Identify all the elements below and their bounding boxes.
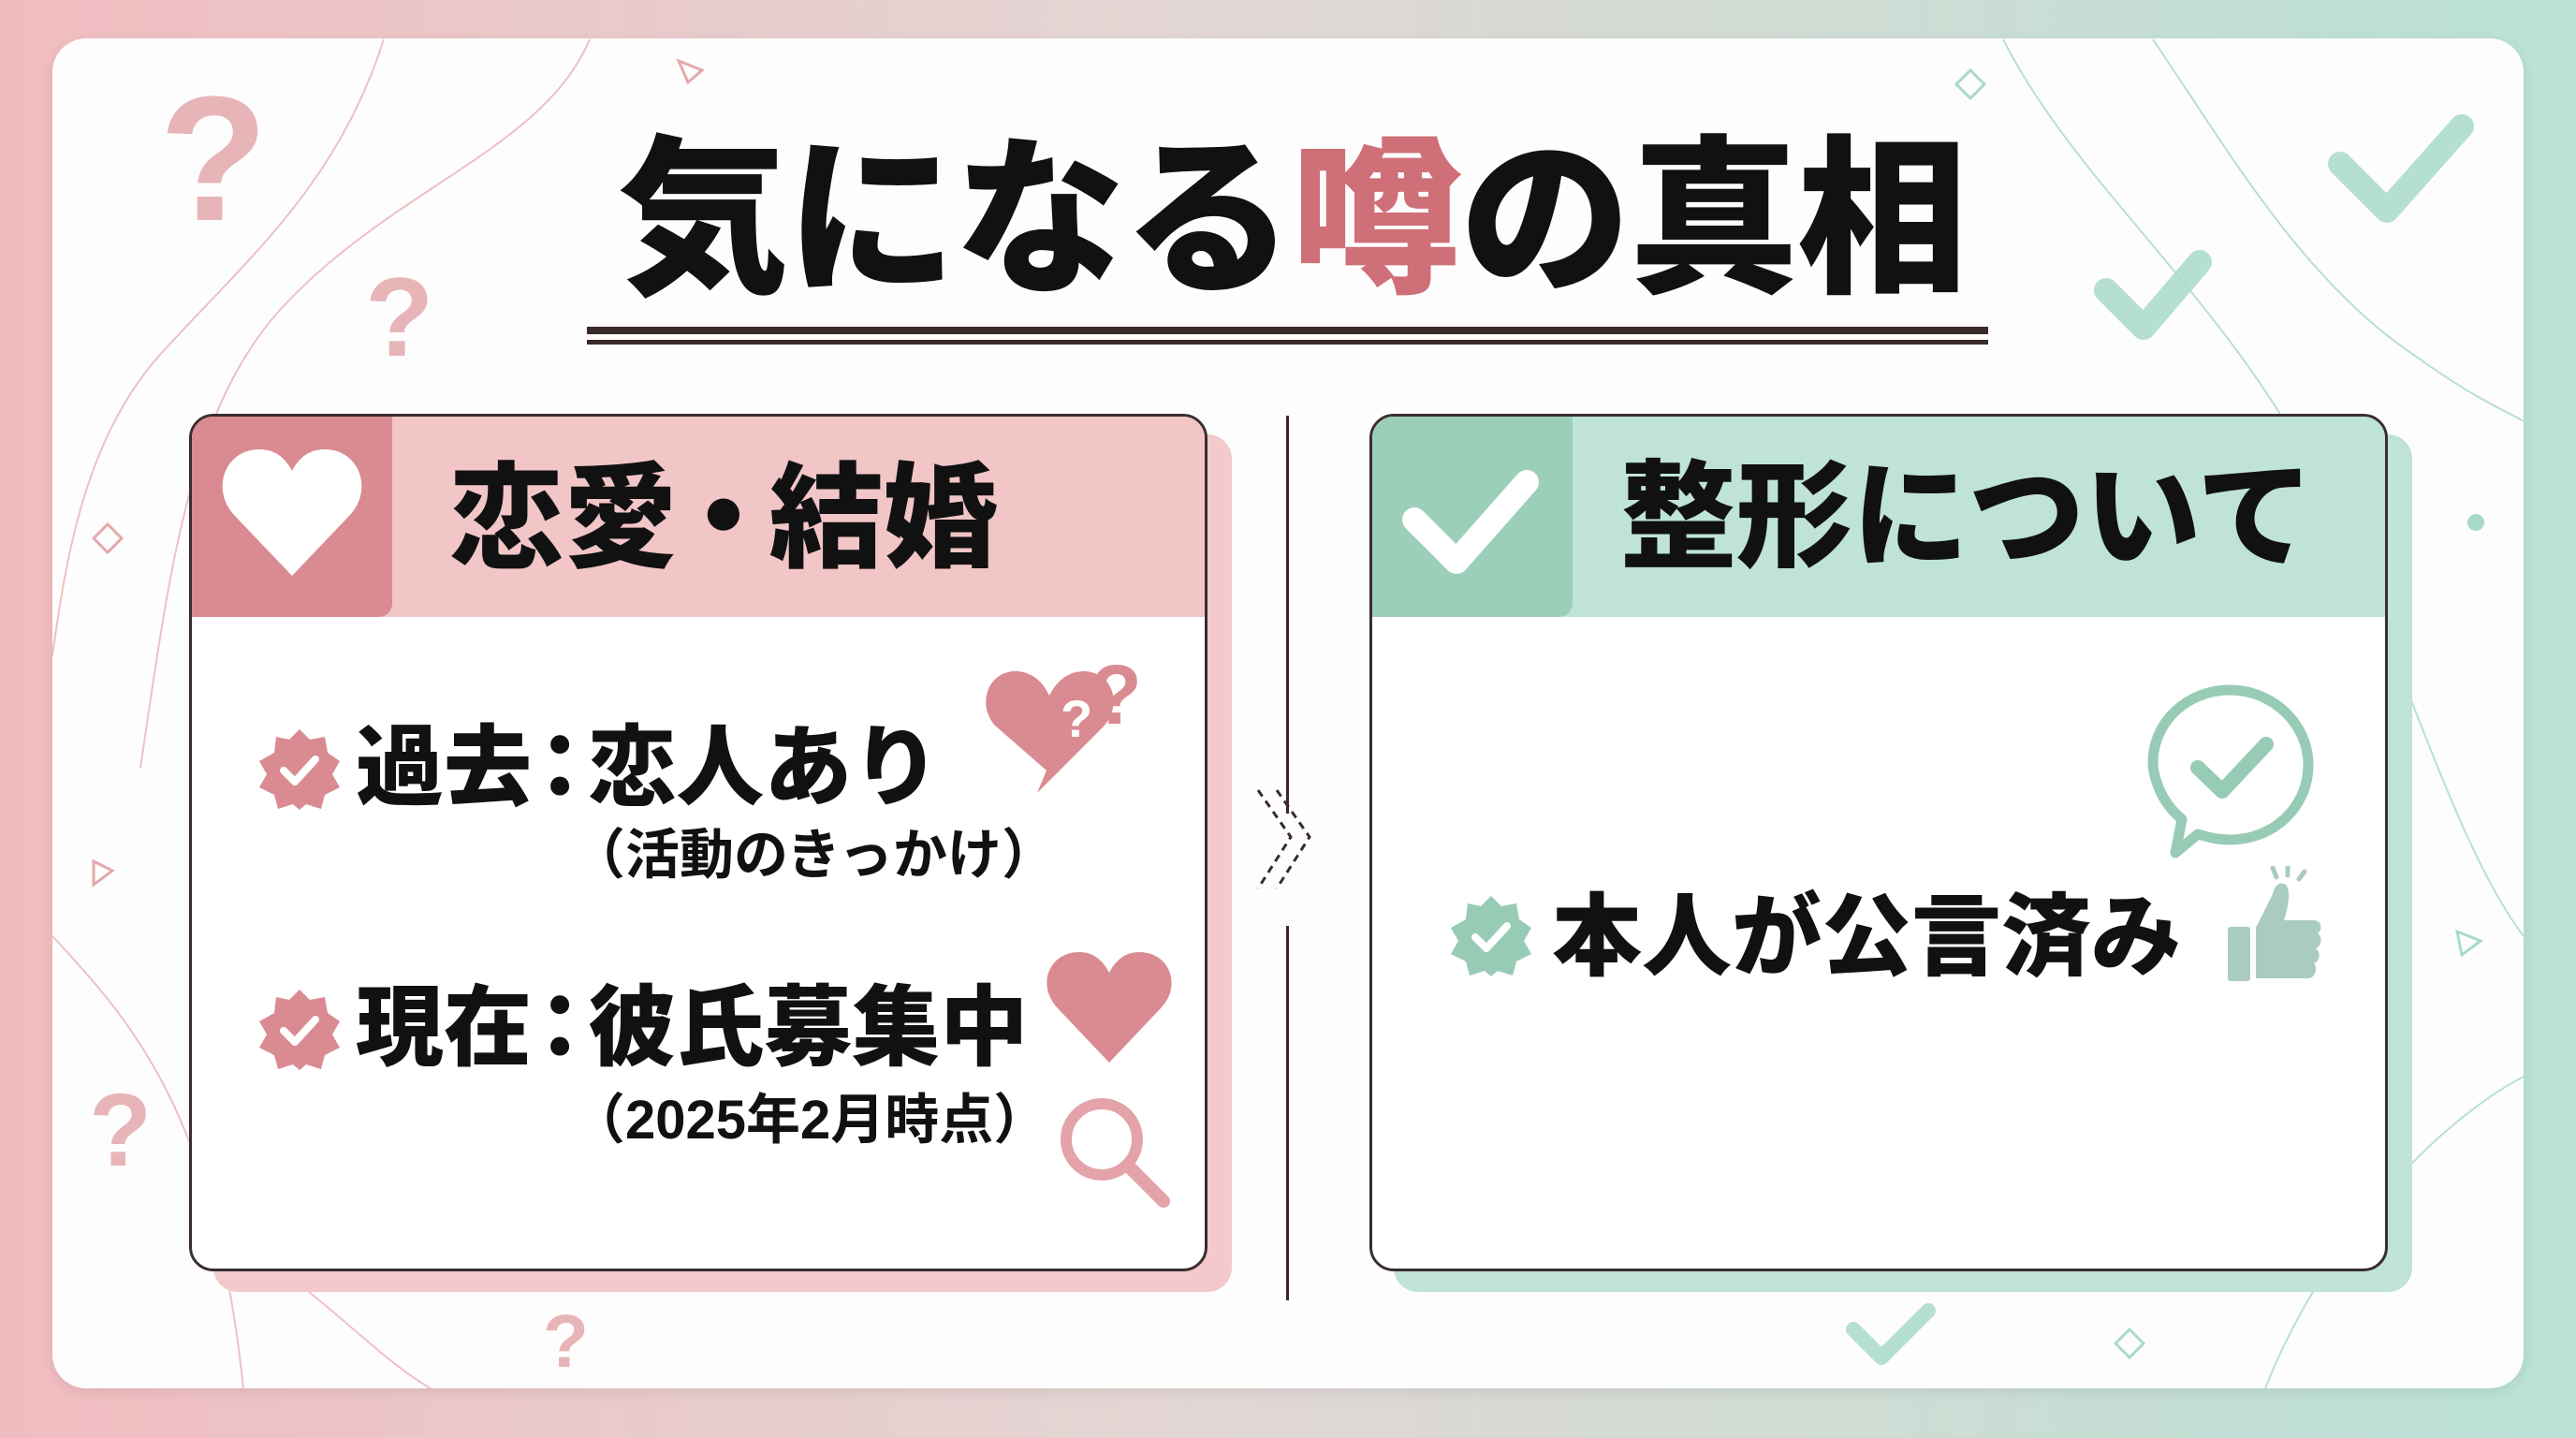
title: 気になる噂の真相 xyxy=(618,125,1966,315)
decorations: ? xyxy=(543,1299,589,1383)
heading: 恋愛 結婚 xyxy=(449,455,998,582)
item: now: 現在 彼氏募集中 xyxy=(356,978,1028,1077)
item: past xyxy=(259,718,1056,886)
title underline xyxy=(587,327,1988,345)
decorations: ? xyxy=(89,1073,152,1188)
icon: magnifier xyxy=(1061,1098,1170,1208)
item: now: （2025年2月時点） xyxy=(571,1090,1047,1151)
decorations: ? xyxy=(365,255,433,380)
item: publicly stated: 本人が公言済み xyxy=(1552,888,2181,988)
item: past: （活動のきっかけ） xyxy=(571,825,1056,886)
item: past: ： xyxy=(516,718,604,816)
icon: big heart xyxy=(1046,952,1172,1063)
icon: speech bubble check xyxy=(2147,685,2314,858)
icon: heart speech with question: ? xyxy=(1090,651,1142,742)
icon: heart speech with question: ? xyxy=(1061,689,1092,748)
header band xyxy=(1372,417,2391,617)
item: past: 過去 恋人あり xyxy=(356,718,940,816)
panel: cosmetic surgery xyxy=(1369,414,2412,1292)
panel: love & marriage xyxy=(189,414,1232,1292)
heading: ・ xyxy=(666,455,781,582)
item: now: ： xyxy=(516,978,604,1077)
item: now xyxy=(259,978,1047,1151)
center divider xyxy=(1256,416,1311,1300)
icon: check xyxy=(1372,417,1573,617)
icon: heart speech with question xyxy=(986,651,1142,793)
decorations: ? xyxy=(159,60,268,258)
icon: heart xyxy=(192,417,392,617)
icon: thumbs up xyxy=(2228,866,2321,981)
heading: 整形について xyxy=(1620,453,2313,582)
header band xyxy=(192,417,1210,617)
